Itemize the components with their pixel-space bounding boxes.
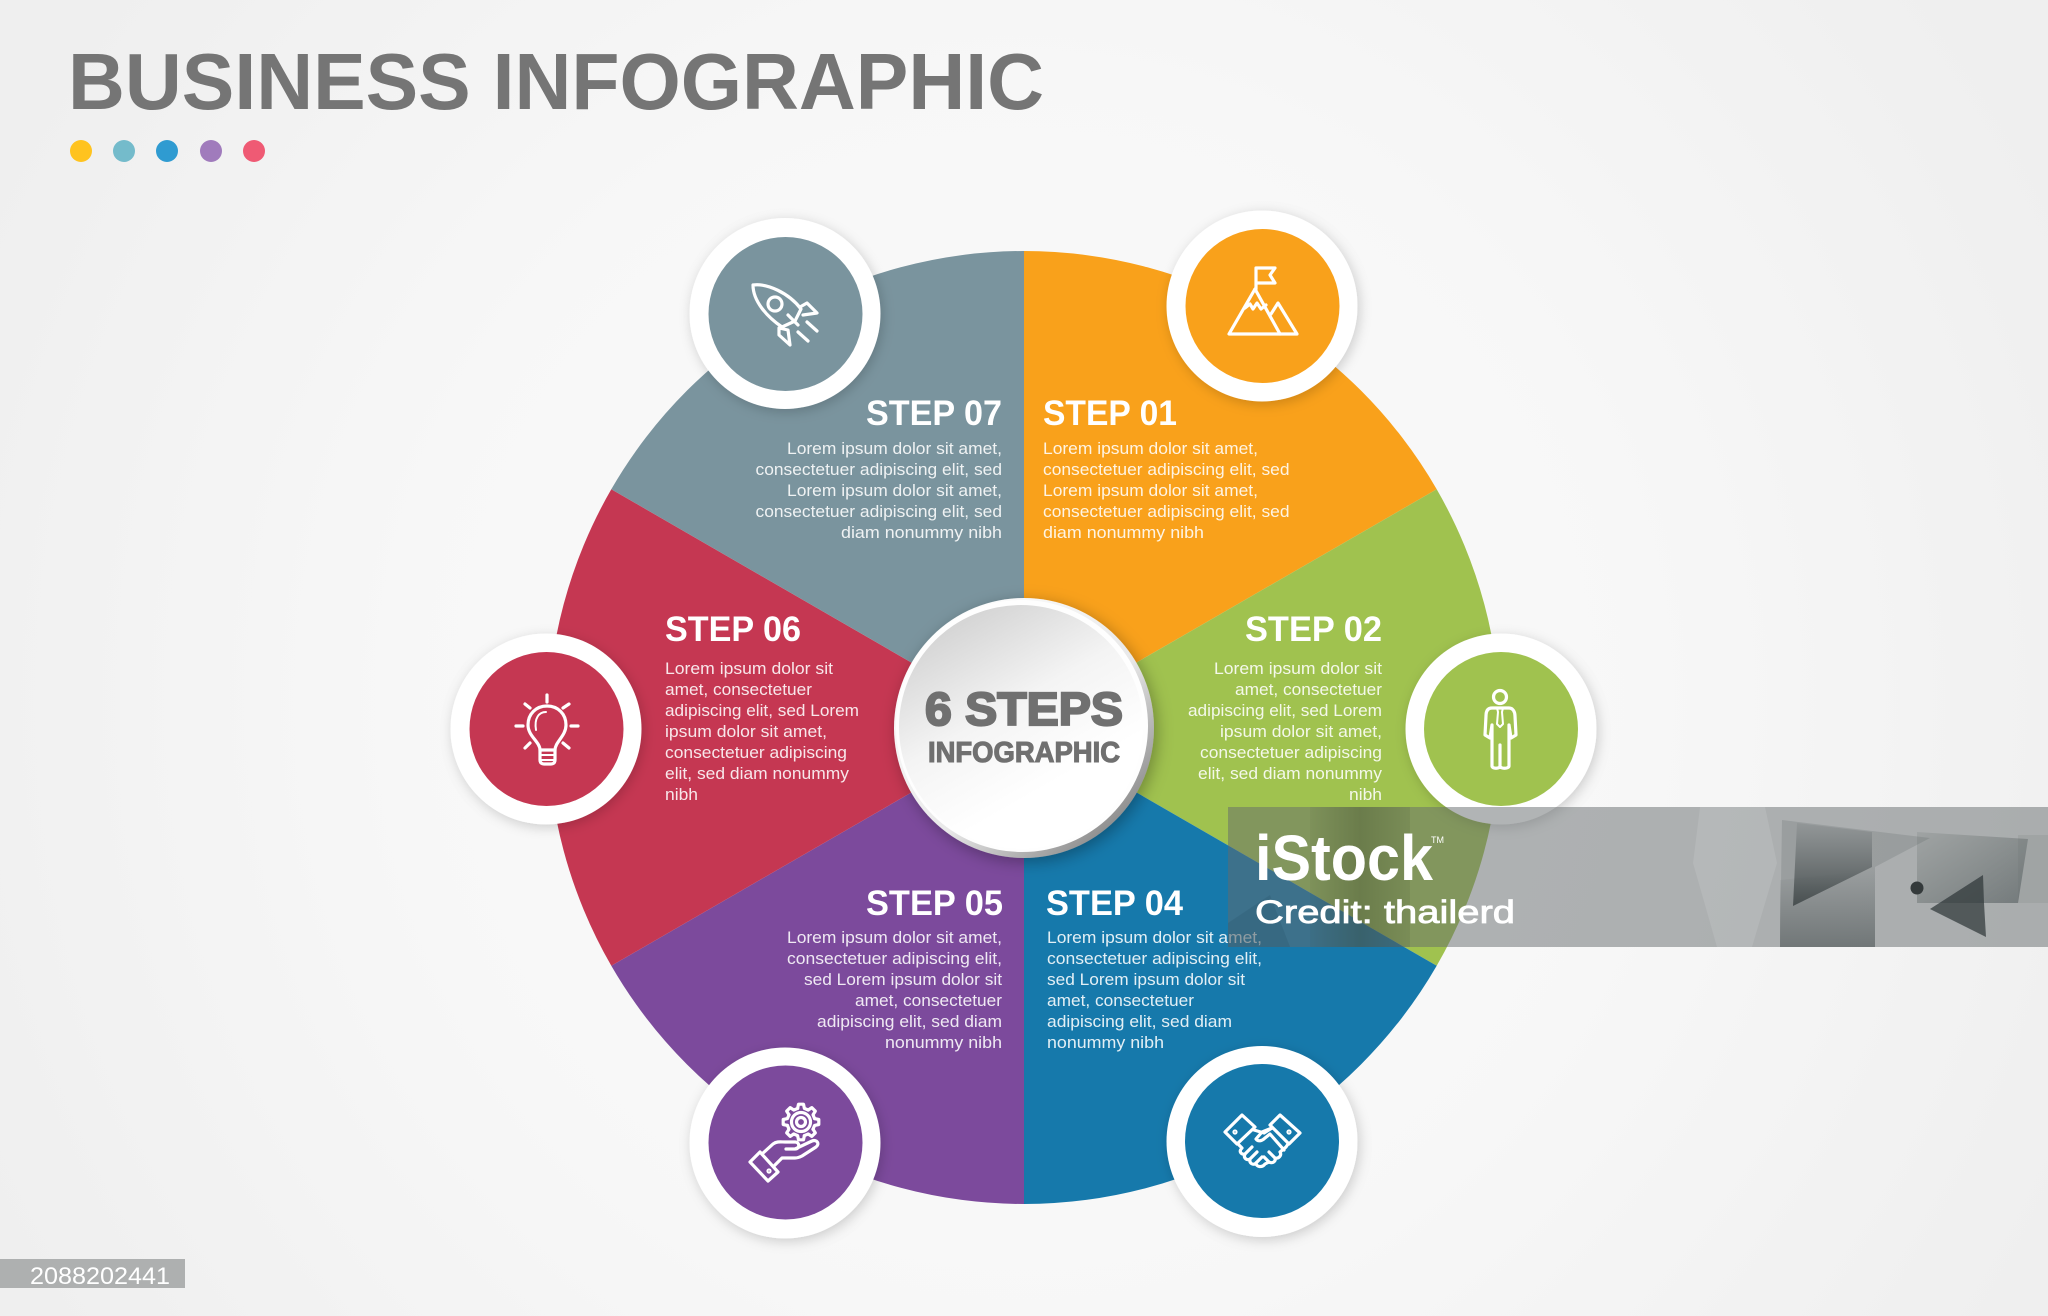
- hub subheading: INFOGRAPHIC: [928, 737, 1120, 769]
- text block: step 07: diam nonummy nibh: [841, 523, 1002, 542]
- watermark credit: Credit: thailerd: [1255, 894, 1515, 930]
- text block: step 04: amet, consectetuer: [1047, 991, 1194, 1010]
- text block: step 07: [756, 394, 1002, 542]
- text block: step 02: Lorem ipsum dolor sit: [1214, 659, 1382, 678]
- icon badge: flag on mountain, step 01: [1166, 210, 1358, 402]
- text block: step 07: consectetuer adipiscing elit, sed: [756, 502, 1002, 521]
- wedge: step 06: [547, 489, 1024, 966]
- text block: step 04: Lorem ipsum dolor sit amet,: [1047, 928, 1262, 947]
- title: BUSINESS INFOGRAPHIC: [68, 37, 1044, 126]
- icon badge: rocket, step 07: [690, 218, 880, 409]
- text block: step 07: STEP 07: [866, 394, 1002, 433]
- image id label: 2088202441: [30, 1263, 170, 1290]
- watermark band: [1228, 807, 2048, 947]
- hub heading: 6 STEPS: [925, 683, 1123, 735]
- center hub: [894, 598, 1154, 858]
- text block: step 02: elit, sed diam nonummy: [1198, 764, 1383, 783]
- watermark trademark: TM: [1431, 835, 1444, 845]
- text block: step 06: [665, 610, 859, 804]
- text block: step 02: STEP 02: [1245, 610, 1382, 649]
- text block: step 05: STEP 05: [866, 884, 1003, 923]
- text block: step 05: amet, consectetuer: [855, 991, 1002, 1010]
- text block: step 01: Lorem ipsum dolor sit amet,: [1043, 439, 1258, 458]
- text block: step 02: consectetuer adipiscing: [1200, 743, 1382, 762]
- pie wheel of step wedges: [547, 251, 1501, 1204]
- text block: step 05: Lorem ipsum dolor sit amet,: [787, 928, 1002, 947]
- text block: step 07: consectetuer adipiscing elit, sed: [756, 460, 1002, 479]
- text block: step 05: nonummy nibh: [885, 1033, 1002, 1052]
- text block: step 05: [787, 884, 1003, 1052]
- icon badge: hand holding gear, step 05: [690, 1048, 880, 1238]
- icon badge: handshake, step 04: [1166, 1046, 1358, 1237]
- wedge: step 01: [1024, 251, 1437, 728]
- text block: step 01: consectetuer adipiscing elit, sed: [1043, 460, 1290, 479]
- text block: step 05: sed Lorem ipsum dolor sit: [804, 970, 1002, 989]
- text block: step 07: Lorem ipsum dolor sit amet,: [787, 439, 1002, 458]
- wedge: step 04: [1024, 728, 1437, 1204]
- watermark logo: iStock: [1255, 822, 1433, 894]
- wedge: step 05: [611, 728, 1024, 1204]
- text block: step 05: consectetuer adipiscing elit,: [787, 949, 1002, 968]
- text block: step 05: adipiscing elit, sed diam: [817, 1012, 1002, 1031]
- text block: step 06: nibh: [665, 785, 698, 804]
- image id label: [0, 1259, 185, 1290]
- icon badge: businessman, step 02: [1406, 634, 1596, 824]
- text block: step 04: consectetuer adipiscing elit,: [1047, 949, 1262, 968]
- text block: step 04: STEP 04: [1046, 884, 1184, 923]
- text block: step 02: [1188, 610, 1383, 804]
- text block: step 06: STEP 06: [665, 610, 801, 649]
- text block: step 02: adipiscing elit, sed Lorem: [1188, 701, 1382, 720]
- text block: step 01: diam nonummy nibh: [1043, 523, 1204, 542]
- wedge: step 02: [1024, 489, 1501, 966]
- text block: step 06: amet, consectetuer: [665, 680, 812, 699]
- icon badge: light bulb, step 06: [450, 634, 642, 824]
- text block: step 07: Lorem ipsum dolor sit amet,: [787, 481, 1002, 500]
- text block: step 06: elit, sed diam nonummy: [665, 764, 850, 783]
- text block: step 04: adipiscing elit, sed diam: [1047, 1012, 1232, 1031]
- text block: step 01: Lorem ipsum dolor sit amet,: [1043, 481, 1258, 500]
- text block: step 02: ipsum dolor sit amet,: [1220, 722, 1382, 741]
- text block: step 04: [1046, 884, 1262, 1052]
- text block: step 02: nibh: [1349, 785, 1382, 804]
- text block: step 06: consectetuer adipiscing: [665, 743, 847, 762]
- text block: step 06: Lorem ipsum dolor sit: [665, 659, 833, 678]
- text block: step 01: STEP 01: [1043, 394, 1177, 433]
- text block: step 06: ipsum dolor sit amet,: [665, 722, 827, 741]
- text block: step 01: consectetuer adipiscing elit, sed: [1043, 502, 1290, 521]
- text block: step 04: nonummy nibh: [1047, 1033, 1164, 1052]
- text block: step 04: sed Lorem ipsum dolor sit: [1047, 970, 1245, 989]
- text block: step 01: [1043, 394, 1290, 542]
- text block: step 02: amet, consectetuer: [1235, 680, 1382, 699]
- text block: step 06: adipiscing elit, sed Lorem: [665, 701, 859, 720]
- decorative coloured dots: [70, 140, 265, 162]
- wedge: step 07: [611, 251, 1024, 727]
